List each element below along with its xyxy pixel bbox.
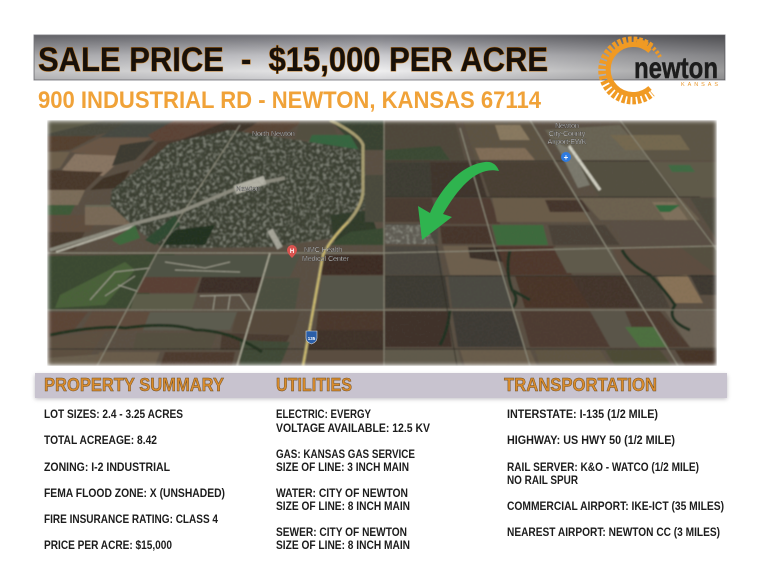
highway i-135 (303, 120, 363, 366)
text block: utilities: VOLTAGE AVAILABLE: 12.5 KV (276, 423, 430, 435)
text block: utilities: SEWER: CITY OF NEWTON (276, 527, 407, 539)
text block: utilities: GAS: KANSAS GAS SERVICE (276, 449, 415, 461)
map label: medical center: H (290, 249, 294, 255)
text block: property summary: TOTAL ACREAGE: 8.42 (44, 435, 157, 447)
fields south west (47, 277, 300, 366)
map label: medical center (287, 245, 350, 263)
icon: green arrow to site (418, 162, 499, 240)
text block: property summary: FEMA FLOOD ZONE: X (UNSHADED) (44, 488, 225, 500)
text block: transportation: NEAREST AIRPORT: NEWTON CC (3 MILES) (507, 527, 720, 539)
text block: transportation: COMMERCIAL AIRPORT: IKE-ICT (35 MILES) (507, 501, 724, 513)
industrial site (385, 225, 435, 244)
text block: property summary: LOT SIZES: 2.4 - 3.25 ACRES (44, 409, 183, 421)
text block: transportation: INTERSTATE: I-135 (1/2 MILE) (507, 409, 658, 421)
map label: newton: Newton (236, 186, 260, 193)
text block: utilities (276, 409, 430, 552)
title banner (34, 35, 725, 80)
text block: property summary (44, 409, 225, 552)
logo: newton kansas: KANSAS (681, 82, 718, 88)
farmland east of highway (308, 175, 384, 350)
text block: utilities: ELECTRIC: EVERGY (276, 409, 371, 421)
heading: property summary: PROPERTY SUMMARY (44, 374, 225, 395)
text block: property summary: PRICE PER ACRE: $15,000 (44, 540, 172, 552)
city of newton (110, 130, 368, 248)
map label: medical center: NMC Health (304, 247, 342, 254)
interstate shield: 135 (308, 336, 316, 341)
river greens (112, 210, 380, 245)
section header band (35, 373, 727, 399)
subtitle: address: 900 INDUSTRIAL RD - NEWTON, KANSAS 67114 (38, 87, 541, 114)
text block: transportation (507, 409, 724, 539)
farmland east (385, 122, 717, 366)
map label: north newton: North Newton (252, 131, 295, 138)
map label: airport (548, 123, 587, 162)
farmland north west (47, 120, 260, 250)
text block: utilities: SIZE OF LINE: 3 INCH MAIN (276, 462, 409, 474)
airport runway (555, 142, 600, 190)
text block: property summary: ZONING: I-2 INDUSTRIAL (44, 462, 170, 474)
map label: medical center: Medical Center (302, 256, 350, 263)
logo: newton kansas: newton (634, 52, 718, 85)
text block: transportation: NO RAIL SPUR (507, 475, 579, 487)
logo: newton kansas (602, 40, 718, 100)
text block: transportation: HIGHWAY: US HWY 50 (1/2 MILE) (507, 435, 675, 447)
residential south west (47, 254, 175, 310)
tree-lined creeks east (440, 250, 690, 345)
title: sale price: SALE PRICE - $15,000 PER ACRE (38, 41, 548, 79)
heading: utilities: UTILITIES (276, 374, 352, 395)
text block: transportation: RAIL SERVER: K&O - WATCO (1/2 MILE) (507, 462, 699, 474)
map label: airport: City-County (549, 131, 586, 138)
heading: transportation: TRANSPORTATION (504, 374, 657, 395)
map feathered edge (44, 117, 720, 369)
map label: airport: + (564, 153, 569, 162)
text block: property summary: FIRE INSURANCE RATING: CLASS 4 (44, 514, 219, 526)
text block: utilities: SIZE OF LINE: 8 INCH MAIN (276, 501, 410, 513)
creek line (50, 325, 262, 352)
aerial map (47, 120, 717, 366)
text block: utilities: SIZE OF LINE: 8 INCH MAIN (276, 540, 410, 552)
farmland north centre (246, 120, 384, 150)
roads (47, 120, 717, 366)
text block: utilities: WATER: CITY OF NEWTON (276, 488, 408, 500)
downtown and railway (50, 178, 285, 252)
map label: airport: Airport-EWK (548, 139, 587, 146)
map label: airport: Newton (555, 123, 579, 130)
interstate shield (306, 331, 317, 344)
